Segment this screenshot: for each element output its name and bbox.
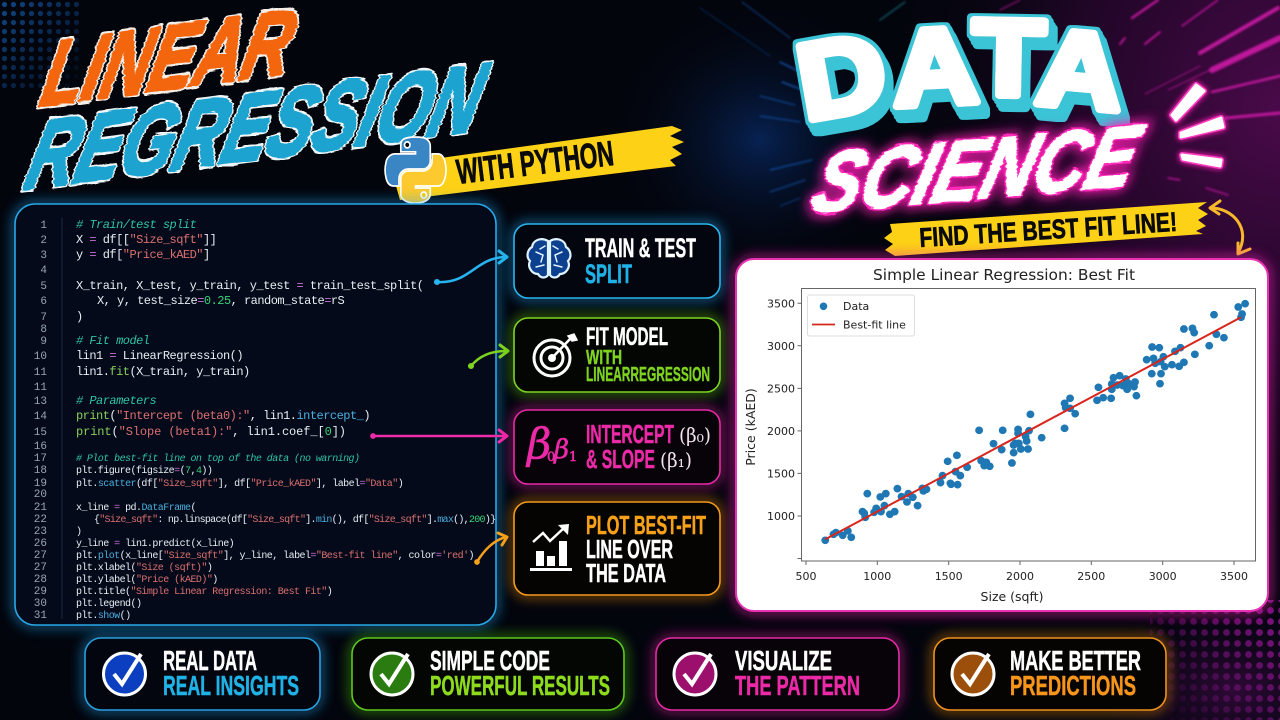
text: THE DATA [586, 558, 666, 588]
x tick labels: 2000 [1006, 570, 1034, 583]
title: science: SCIENCE [803, 107, 1151, 232]
text: THE PATTERN [735, 670, 860, 701]
badge: make better predictions [934, 638, 1166, 710]
line numbers: 16 [34, 441, 47, 453]
line numbers: 23 [34, 526, 47, 538]
badge: visualize the pattern [656, 638, 899, 710]
line numbers: 10 [34, 351, 47, 363]
title: data: A [1032, 7, 1128, 134]
line numbers: 18 [34, 465, 47, 477]
text: (β₀) [679, 423, 711, 447]
line numbers: 22 [34, 514, 47, 526]
icon: chart [530, 524, 572, 571]
code text: # Parameters [76, 394, 156, 408]
icon: check [104, 653, 146, 695]
y tick labels [767, 298, 795, 523]
code text: plt.scatter(df["Size_sqft"], df["Price_kAED"], label="Data") [76, 478, 403, 490]
icon: check [674, 653, 716, 695]
code text: plt.title("Simple Linear Regression: Best Fit") [76, 586, 332, 598]
text: INTERCEPT [586, 419, 674, 449]
line numbers: 17 [34, 453, 47, 465]
line numbers: 27 [34, 550, 47, 562]
x tick labels: 3500 [1220, 570, 1248, 583]
icon: beta symbols: β [553, 435, 569, 465]
code text: plt.figure(figsize=(7,4)) [76, 465, 212, 477]
line numbers: 15 [34, 427, 47, 439]
text: TRAIN & TEST [585, 233, 696, 263]
code text: ) [76, 310, 83, 324]
code text: plt.legend() [76, 598, 141, 610]
card: train and test split [514, 224, 720, 298]
y tick labels: 3500 [767, 298, 795, 310]
line numbers [34, 220, 47, 622]
banner: find the best fit line [884, 202, 1208, 256]
arrow: code to intercept and slope [371, 430, 507, 442]
title: data [788, 0, 1128, 144]
code text: print("Intercept (beta0):", lin1.intercept_) [76, 409, 370, 423]
text: POWERFUL RESULTS [430, 670, 610, 701]
line numbers: 27 [34, 562, 47, 574]
line numbers: 3 [40, 250, 47, 262]
text: PREDICTIONS [1010, 670, 1136, 701]
chart title: Simple Linear Regression: Best Fit [873, 266, 1135, 284]
line numbers: 20 [34, 489, 47, 501]
line numbers: 31 [34, 610, 47, 622]
line numbers: 2 [40, 235, 47, 247]
panel: code editor [15, 204, 496, 625]
title word: REGRESSION: REGRESSION [17, 43, 497, 210]
line numbers: 8 [40, 324, 47, 336]
line numbers: 19 [34, 478, 47, 490]
text: PLOT BEST-FIT [586, 510, 706, 540]
text: MAKE BETTER [1010, 645, 1141, 676]
line numbers: 9 [40, 336, 47, 348]
line numbers: 26 [34, 538, 47, 550]
code text: # Fit model [76, 334, 150, 348]
code text: # Train/test split [76, 218, 197, 232]
line numbers: 29 [34, 586, 47, 598]
text [430, 645, 610, 701]
code text: y_line = lin1.predict(x_line) [76, 538, 234, 550]
arrow: code to fit model [469, 345, 508, 368]
badge: simple code powerful results [352, 638, 624, 710]
code text: ) [76, 526, 81, 538]
title: data: A [889, 5, 981, 130]
title word: REGRESSION: REGRESSION [17, 43, 497, 210]
text [735, 645, 860, 701]
axes [798, 288, 1256, 565]
line numbers: 28 [34, 574, 47, 586]
best fit line [825, 317, 1241, 539]
code text: x_line = pd.DataFrame( [76, 502, 196, 514]
legend [808, 295, 914, 336]
arrow: code to plot [475, 533, 507, 564]
x tick labels: 2500 [1077, 570, 1105, 583]
code text [76, 218, 495, 622]
icon: burst dashes [1172, 85, 1223, 166]
title: science: SCIENCE [803, 107, 1151, 232]
arrow: code to train test split [435, 251, 507, 284]
code text: lin1.fit(X_train, y_train) [76, 365, 250, 379]
title: science: SCIENCE [803, 107, 1151, 232]
arrow: yellow curved [1210, 201, 1250, 254]
title: data: T [971, 0, 1046, 119]
code text: plt.show() [76, 610, 131, 622]
x tick labels: 500 [796, 570, 816, 583]
banner text: FIND THE BEST FIT LINE! [918, 207, 1178, 253]
line numbers: 21 [34, 502, 47, 514]
text: REAL INSIGHTS [163, 670, 299, 701]
text [163, 645, 299, 701]
y tick labels: 2500 [767, 382, 795, 396]
text: REAL DATA [163, 645, 257, 676]
banner: with python [390, 126, 684, 200]
icon: check [952, 653, 994, 695]
text: & SLOPE [586, 444, 655, 474]
title: linear regression [17, 0, 497, 210]
text [586, 510, 706, 588]
text [586, 323, 710, 386]
text [1010, 645, 1141, 701]
icon: beta symbols: 0 [547, 450, 555, 465]
line numbers: 6 [40, 296, 47, 308]
icon: check [371, 653, 413, 695]
code text: plt.plot(x_line["Size_sqft"], y_line, label="Best-fit line", color='red') [76, 550, 474, 562]
icon: beta symbols: 1 [569, 450, 577, 465]
icon: beta symbols [525, 419, 577, 468]
code text: # Plot best-fit line on top of the data (no warning) [76, 453, 359, 465]
text: VISUALIZE [735, 645, 832, 676]
icon: beta symbols: β [525, 419, 551, 468]
text: WITH [586, 347, 622, 369]
x tick labels [796, 570, 1248, 583]
icon: brain [528, 239, 570, 278]
text [586, 419, 711, 474]
x axis label: Size (sqft) [981, 589, 1043, 604]
x tick labels: 1000 [863, 570, 891, 583]
y tick labels: 3000 [767, 340, 795, 353]
code text: X = df[["Size_sqft"]] [76, 233, 216, 247]
text: FIT MODEL [586, 323, 668, 351]
code text: {"Size_sqft": np.linspace(df["Size_sqft"].min(), df["Size_sqft"].max(),200)} [94, 514, 495, 526]
code text: print("Slope (beta1):", lin1.coef_[0]) [76, 425, 346, 439]
line numbers: 14 [34, 411, 47, 423]
code text: X, y, test_size=0.25, random_state=rS [97, 294, 345, 308]
line numbers: 5 [40, 281, 47, 293]
badge: real data real insights [85, 638, 320, 710]
text: SIMPLE CODE [430, 645, 550, 676]
text: (β₁) [660, 448, 692, 472]
line numbers: 13 [34, 396, 47, 408]
banner text: WITH PYTHON [454, 134, 616, 192]
card: intercept and slope [514, 410, 720, 484]
line numbers: 7 [40, 312, 47, 324]
y tick labels: 2000 [767, 425, 795, 438]
panel: scatter plot [736, 259, 1268, 611]
card: plot best fit [514, 502, 720, 595]
y axis label: Price (kAED) [743, 388, 758, 466]
title: data: D [788, 10, 895, 144]
scatter points [821, 300, 1249, 544]
legend: Best-fit line [843, 318, 906, 332]
code text: y = df["Price_kAED"] [76, 248, 210, 262]
line numbers: 11 [34, 382, 47, 394]
title word: REGRESSION [17, 43, 497, 210]
line numbers: 4 [40, 265, 47, 277]
legend: Data [843, 300, 869, 313]
text: LINE OVER [586, 534, 673, 564]
icon: target [534, 334, 577, 376]
card: fit model [514, 318, 720, 392]
text [585, 233, 696, 289]
y tick labels: 1000 [767, 510, 795, 523]
x tick labels: 3000 [1149, 570, 1177, 583]
y tick labels: 1500 [767, 468, 795, 480]
x tick labels: 1500 [935, 570, 963, 583]
line numbers: 1 [40, 220, 47, 232]
code text: plt.xlabel("Size (sqft)") [76, 562, 212, 574]
code text: lin1 = LinearRegression() [76, 349, 243, 363]
code text: plt.ylabel("Price (kAED)") [76, 574, 218, 586]
line numbers: 30 [34, 598, 47, 610]
icon: python logo [385, 137, 446, 203]
code text: X_train, X_test, y_train, y_test = train_test_split( [76, 279, 423, 293]
text: LINEARREGRESSION [586, 364, 710, 386]
line numbers: 11 [34, 367, 47, 379]
text: SPLIT [585, 259, 632, 289]
